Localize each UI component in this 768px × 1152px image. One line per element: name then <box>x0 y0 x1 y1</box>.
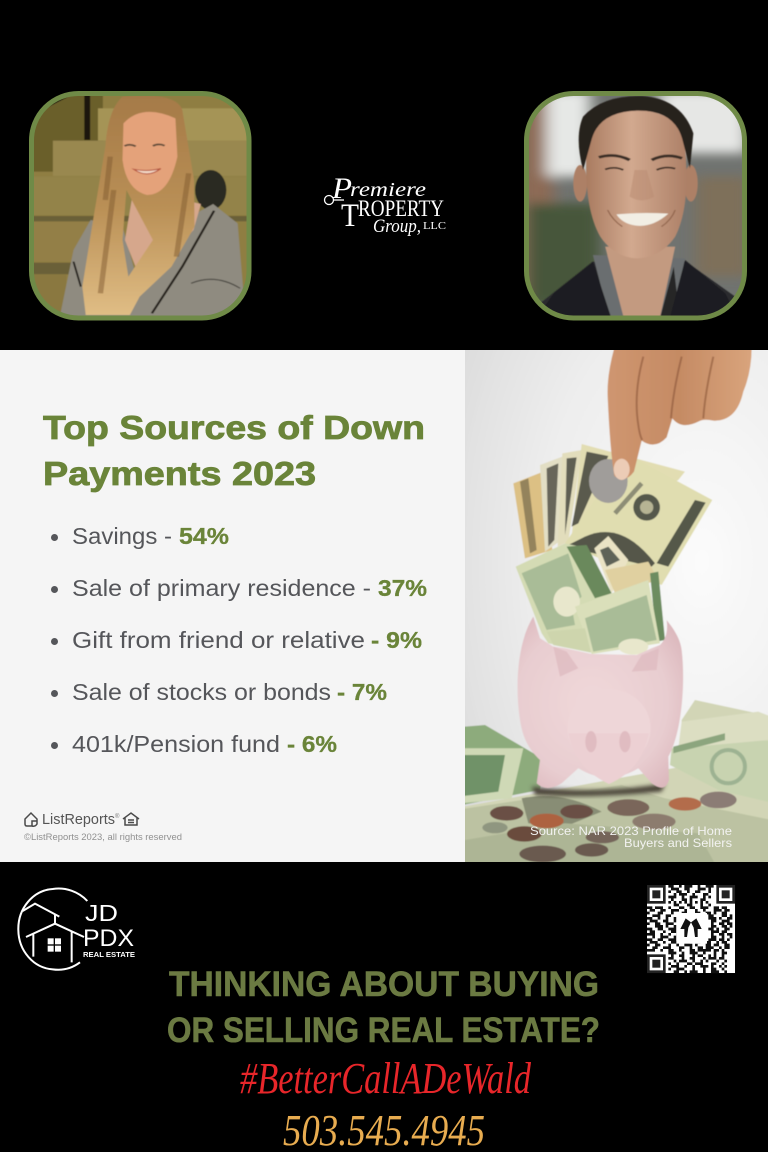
caption: source <box>530 826 732 850</box>
brand: ListReports <box>24 812 182 843</box>
list: sources <box>51 523 427 757</box>
brand: ListReports: ©ListReports 2023, all rights reserved <box>24 832 182 843</box>
logo: Premiere Property Group: LLC <box>423 221 446 232</box>
heading: Payments 2023 <box>43 455 316 492</box>
panel: white text panel <box>0 350 465 862</box>
list: sources: - 6% <box>287 731 337 757</box>
list: sources: - 7% <box>337 679 387 705</box>
photo: man agent portrait <box>519 90 750 322</box>
brand: ListReports: ListReports <box>42 812 115 828</box>
logo: Premiere Property Group: T <box>341 198 359 234</box>
logo: JD PDX Real Estate: PDX <box>83 925 134 952</box>
logo: Premiere Property Group: ROPERTY <box>358 196 444 221</box>
list: sources: Sale of stocks or bonds <box>72 679 331 705</box>
headline: thinking about buying: OR SELLING REAL ESTATE? <box>167 1011 600 1050</box>
logo: JD PDX Real Estate: REAL ESTATE <box>83 952 135 959</box>
list: sources: 54% <box>179 523 229 549</box>
list: sources: 37% <box>378 575 427 601</box>
caption: source: Buyers and Sellers <box>624 836 732 850</box>
photo: piggy bank with money <box>465 350 768 862</box>
QR code <box>647 885 735 973</box>
list: sources: 401k/Pension fund <box>72 731 280 757</box>
logo: JD PDX Real Estate: JD <box>85 900 118 926</box>
list: sources: Savings - <box>72 523 172 549</box>
caption: source: Source: NAR 2023 Profile of Home <box>530 824 732 838</box>
logo: Premiere Property Group: P <box>331 172 352 205</box>
heading <box>43 409 425 492</box>
logo: Premiere Property Group: Group, <box>373 216 421 237</box>
logo: JD PDX Real Estate <box>18 889 135 970</box>
photo: woman agent portrait <box>29 91 252 320</box>
logo: Premiere Property Group <box>324 172 446 237</box>
heading: Top Sources of Down <box>43 409 425 446</box>
list: sources: - 9% <box>371 627 422 653</box>
headline: thinking about buying: THINKING ABOUT BUYING <box>169 965 599 1004</box>
logo: Premiere Property Group: remiere <box>350 179 426 201</box>
headline: thinking about buying <box>167 965 600 1050</box>
brand: ListReports: ® <box>115 813 120 820</box>
list: sources: Gift from friend or relative <box>72 627 365 653</box>
list: sources: Sale of primary residence - <box>72 575 371 601</box>
hashtag: #BetterCallADeWald <box>240 1054 532 1103</box>
